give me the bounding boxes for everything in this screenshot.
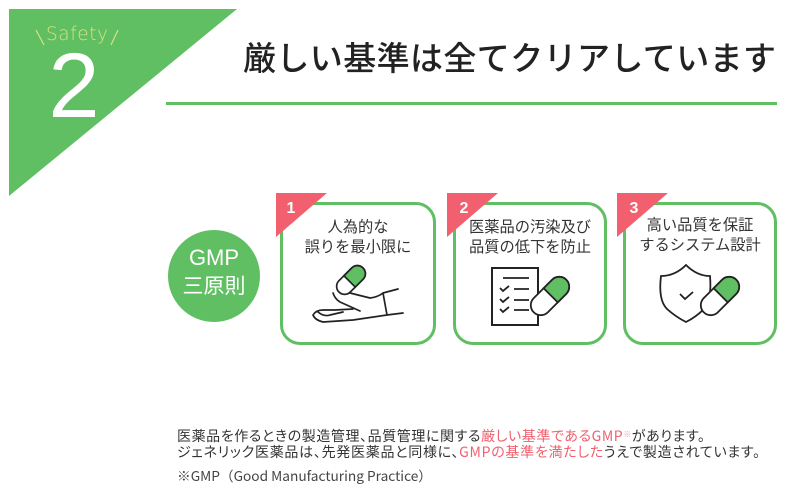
card 2 caption [469,215,591,256]
card 1 [280,202,436,345]
footnote: ※GMP（Good Manufacturing Practice） [177,465,432,485]
GMP circle [168,230,260,322]
three principles label: 三原則 [182,270,246,300]
body text [177,426,761,485]
body text: ジェネリック医薬品は、先発医薬品と同様に、GMPの基準を満たしたうえで製造されています。 [177,442,761,462]
card 3 caption: するシステム設計 [639,232,761,254]
ribbon 3: 3 [630,200,639,217]
card 2 [453,202,607,345]
card 2 caption: 品質の低下を防止 [469,234,591,256]
card 3 caption: 高い品質を保証 [647,213,753,235]
card 2 caption: 医薬品の汚染及び [469,215,591,237]
number 2: 2 [48,35,100,137]
GMP label: GMP [189,245,239,270]
title underline [166,102,777,105]
icon: checklist with capsule [491,267,570,326]
card 1 caption [305,215,411,256]
card 3 [623,202,777,345]
card 3 caption [639,213,761,254]
ribbon 1: 1 [287,200,296,217]
ribbon 2: 2 [460,200,469,217]
title: 厳しい基準は全てクリアしています [243,32,776,80]
icon: hand with capsule [312,264,404,323]
card 1 caption: 誤りを最小限に [305,234,411,256]
safety label: Safety [46,24,108,45]
icon: shield with capsule [659,264,740,323]
corner triangle badge [9,9,237,196]
card 1 caption: 人為的な [328,215,388,237]
body text: 医薬品を作るときの製造管理、品質管理に関する厳しい基準であるGMP※があります。 [177,426,705,446]
